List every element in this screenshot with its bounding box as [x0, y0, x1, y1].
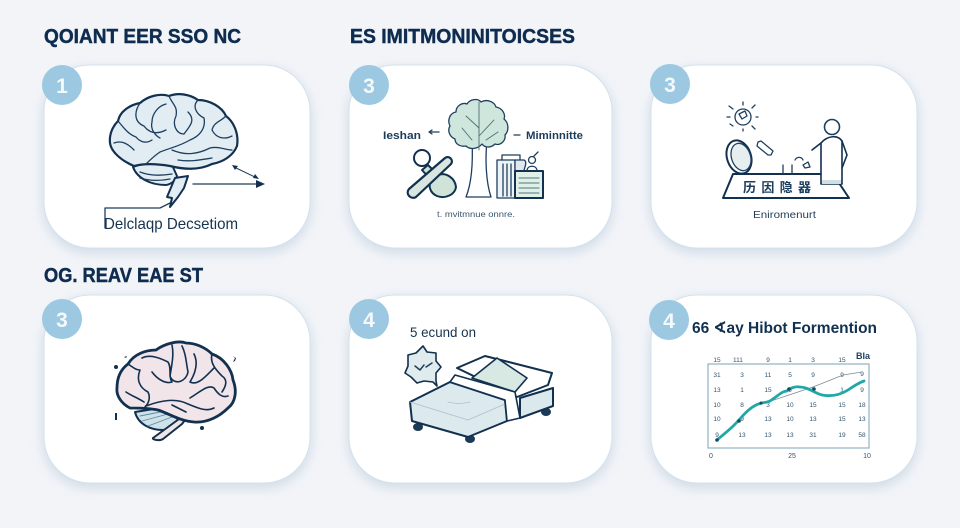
- grid numbers: 15: [838, 416, 846, 423]
- grid numbers: 13: [764, 416, 772, 423]
- label: environment: Eniromenurt: [753, 210, 816, 221]
- panel: tree and environment items: [349, 65, 612, 248]
- panel: brain with decision label: [42, 65, 310, 248]
- grid numbers: 3: [766, 402, 770, 409]
- top labels: 15: [713, 357, 721, 364]
- grid numbers: 8: [740, 402, 744, 409]
- grid numbers: 58: [858, 432, 866, 439]
- top labels: 111: [733, 357, 743, 364]
- icon: pink brain: [117, 342, 235, 440]
- icon: pill: [757, 141, 773, 155]
- badge 1: [42, 65, 82, 105]
- top labels: 1: [788, 357, 792, 364]
- badge 3: 3: [56, 309, 68, 332]
- axis labels: 0: [709, 453, 713, 460]
- teal progress line: [717, 381, 864, 440]
- icon: speech bubble: [405, 346, 441, 386]
- icon: tree: [449, 100, 508, 197]
- grid numbers: 13: [713, 387, 721, 394]
- grid numbers: 15: [838, 402, 846, 409]
- grid numbers: 3: [811, 387, 815, 394]
- top labels: 15: [838, 357, 846, 364]
- axis labels: [709, 453, 871, 460]
- arrow: small double: [232, 165, 259, 179]
- grid numbers: 10: [786, 416, 794, 423]
- grid numbers: 1: [840, 387, 844, 394]
- panel: habit chart: [649, 295, 917, 483]
- badge 1: 1: [56, 75, 68, 98]
- grid numbers: 10: [713, 402, 721, 409]
- badge 3: 3: [363, 75, 375, 98]
- label: decision: Delclaqp Decsetiom: [104, 216, 238, 233]
- icon: bed: [410, 356, 553, 443]
- grid numbers: 1: [740, 387, 744, 394]
- icon: sun: [727, 102, 758, 131]
- panel: bed: [349, 295, 612, 483]
- grid numbers: [713, 371, 866, 439]
- arrow: left: [429, 130, 439, 134]
- grid numbers: 13: [786, 432, 794, 439]
- grid numbers: 19: [838, 432, 846, 439]
- badge 3: [349, 65, 389, 105]
- badge 4: 4: [663, 310, 675, 333]
- grid numbers: 31: [809, 432, 817, 439]
- grid numbers: 13: [809, 416, 817, 423]
- grid numbers: 31: [713, 372, 721, 379]
- panel: environment scene: [650, 64, 917, 248]
- badge 3: [42, 299, 82, 339]
- badge 3: 3: [664, 74, 676, 97]
- grid numbers: 15: [809, 402, 817, 409]
- axis labels: 25: [788, 453, 796, 460]
- badge 3: [650, 64, 690, 104]
- grid numbers: 10: [786, 402, 794, 409]
- badge 4: [649, 300, 689, 340]
- label: right: Miminnitte: [526, 130, 583, 142]
- line chart: [708, 351, 871, 448]
- grid numbers: 13: [738, 432, 746, 439]
- grid numbers: 9: [811, 372, 815, 379]
- axis labels: 10: [863, 453, 871, 460]
- icon: mirror: [722, 137, 756, 177]
- icon: blue brain: [110, 94, 237, 207]
- grid numbers: 11: [765, 372, 772, 379]
- grid numbers: 9: [840, 372, 844, 379]
- arrow: horizontal: [193, 180, 265, 188]
- icon: mat with symbols: 历 因 隐 器: [743, 180, 811, 195]
- grid numbers: 9: [788, 387, 792, 394]
- icon: mat with symbols: [723, 157, 849, 198]
- badge 4: 4: [363, 309, 375, 332]
- badge 4: [349, 299, 389, 339]
- grid numbers: 13: [764, 432, 772, 439]
- grid numbers: 10: [713, 416, 721, 423]
- heading: second section: ES IMITMONINITOICSES: [350, 26, 575, 48]
- decorative specks: [114, 356, 236, 430]
- grid numbers: 3: [740, 372, 744, 379]
- top labels: BIa: [856, 351, 871, 361]
- grid numbers: 9: [860, 387, 864, 394]
- grid numbers: 9: [715, 432, 719, 439]
- grid numbers: 15: [764, 387, 772, 394]
- top labels: 9: [766, 357, 770, 364]
- heading: first section: QOIANT EER SSO NC: [44, 26, 241, 48]
- label: sleep: 5 ecund on: [410, 325, 476, 340]
- chart title: 66 ∢ay Hibot Formention: [692, 320, 877, 337]
- grid numbers: 18: [858, 402, 866, 409]
- icon: buildings and document: [497, 152, 543, 198]
- markers: [715, 387, 816, 442]
- grid numbers: 9: [860, 371, 864, 378]
- icon: crossed items: [408, 150, 456, 198]
- label: left: Ieshan: [383, 130, 421, 142]
- grid numbers: 5: [788, 372, 792, 379]
- grid numbers: 13: [858, 416, 866, 423]
- caption: t. mvitmnue onnre.: [437, 210, 515, 219]
- thin trend line: [762, 372, 862, 403]
- top labels: [713, 351, 871, 364]
- panel: pink brain: [42, 295, 310, 483]
- grid numbers: 9: [740, 416, 744, 423]
- label bracket: [105, 203, 170, 228]
- icon: person: [812, 120, 847, 184]
- heading: third section: OG. REAV EAE ST: [44, 265, 203, 287]
- top labels: 3: [811, 357, 815, 364]
- dash: right: [514, 134, 520, 136]
